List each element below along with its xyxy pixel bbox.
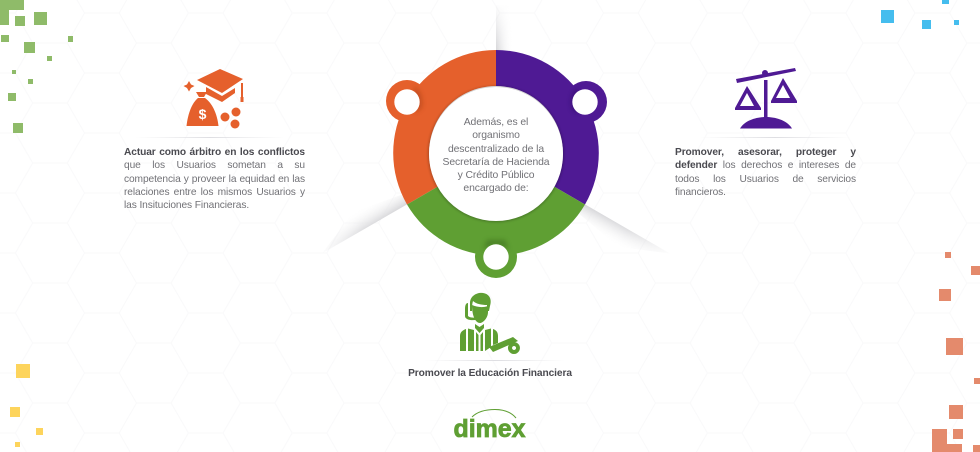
node: green	[475, 236, 517, 278]
icon: graduation cap and money bag	[184, 69, 244, 128]
text block: promover: defender los derechos e intereses de	[675, 160, 856, 171]
icon: advisor with headset	[460, 293, 520, 354]
center text: encargado de:	[463, 183, 529, 194]
node hole: purple	[572, 89, 598, 115]
text block: arbitro: que los Usuarios sometan a su	[124, 160, 305, 171]
center text: descentralizado de la	[448, 144, 544, 155]
center text: organismo	[472, 130, 520, 141]
decorative squares: bottom right orange	[932, 252, 980, 452]
center disc	[429, 87, 563, 221]
center text	[443, 117, 550, 194]
central ring diagram	[386, 50, 607, 278]
icon: scales	[735, 68, 797, 128]
center text: Además, es el	[464, 117, 528, 128]
text block: promover	[675, 147, 856, 198]
node hole: orange	[394, 89, 420, 115]
text block: arbitro: relaciones entre los mismos Usuarios y	[124, 187, 305, 198]
center disc shadow	[428, 86, 564, 222]
node shading	[414, 86, 578, 250]
text block: promover: todos los Usuarios de servicios	[675, 174, 856, 185]
spoke shadows	[312, 5, 670, 271]
decorative squares: top right blue	[881, 0, 959, 29]
decorative squares: top left green	[0, 0, 73, 133]
text block: arbitro: Actuar como árbitro en los conflictos	[124, 147, 305, 158]
node: orange	[386, 80, 428, 122]
dividers	[135, 137, 850, 361]
segment: green	[407, 186, 585, 256]
center text: y Crédito Público	[458, 170, 534, 181]
node hole: green	[483, 244, 509, 270]
node: purple	[565, 81, 607, 123]
segment: orange	[393, 50, 496, 204]
text block: promover: financieros.	[675, 187, 726, 198]
icon: dimex logo: dimex	[454, 415, 526, 443]
text block: arbitro: las Insituciones Financieras.	[124, 200, 249, 211]
segment: purple	[496, 50, 599, 204]
text block: educacion: Promover la Educación Financiera	[408, 368, 572, 379]
text block: promover: Promover, asesorar, proteger y	[675, 147, 856, 158]
decorative squares: bottom left yellow	[10, 364, 43, 447]
text block: arbitro	[124, 147, 305, 211]
text block: arbitro: competencia y proveer la equidad en las	[124, 174, 305, 185]
icon: graduation cap and money bag: $	[199, 106, 207, 122]
center text: Secretaría de Hacienda	[443, 157, 549, 168]
